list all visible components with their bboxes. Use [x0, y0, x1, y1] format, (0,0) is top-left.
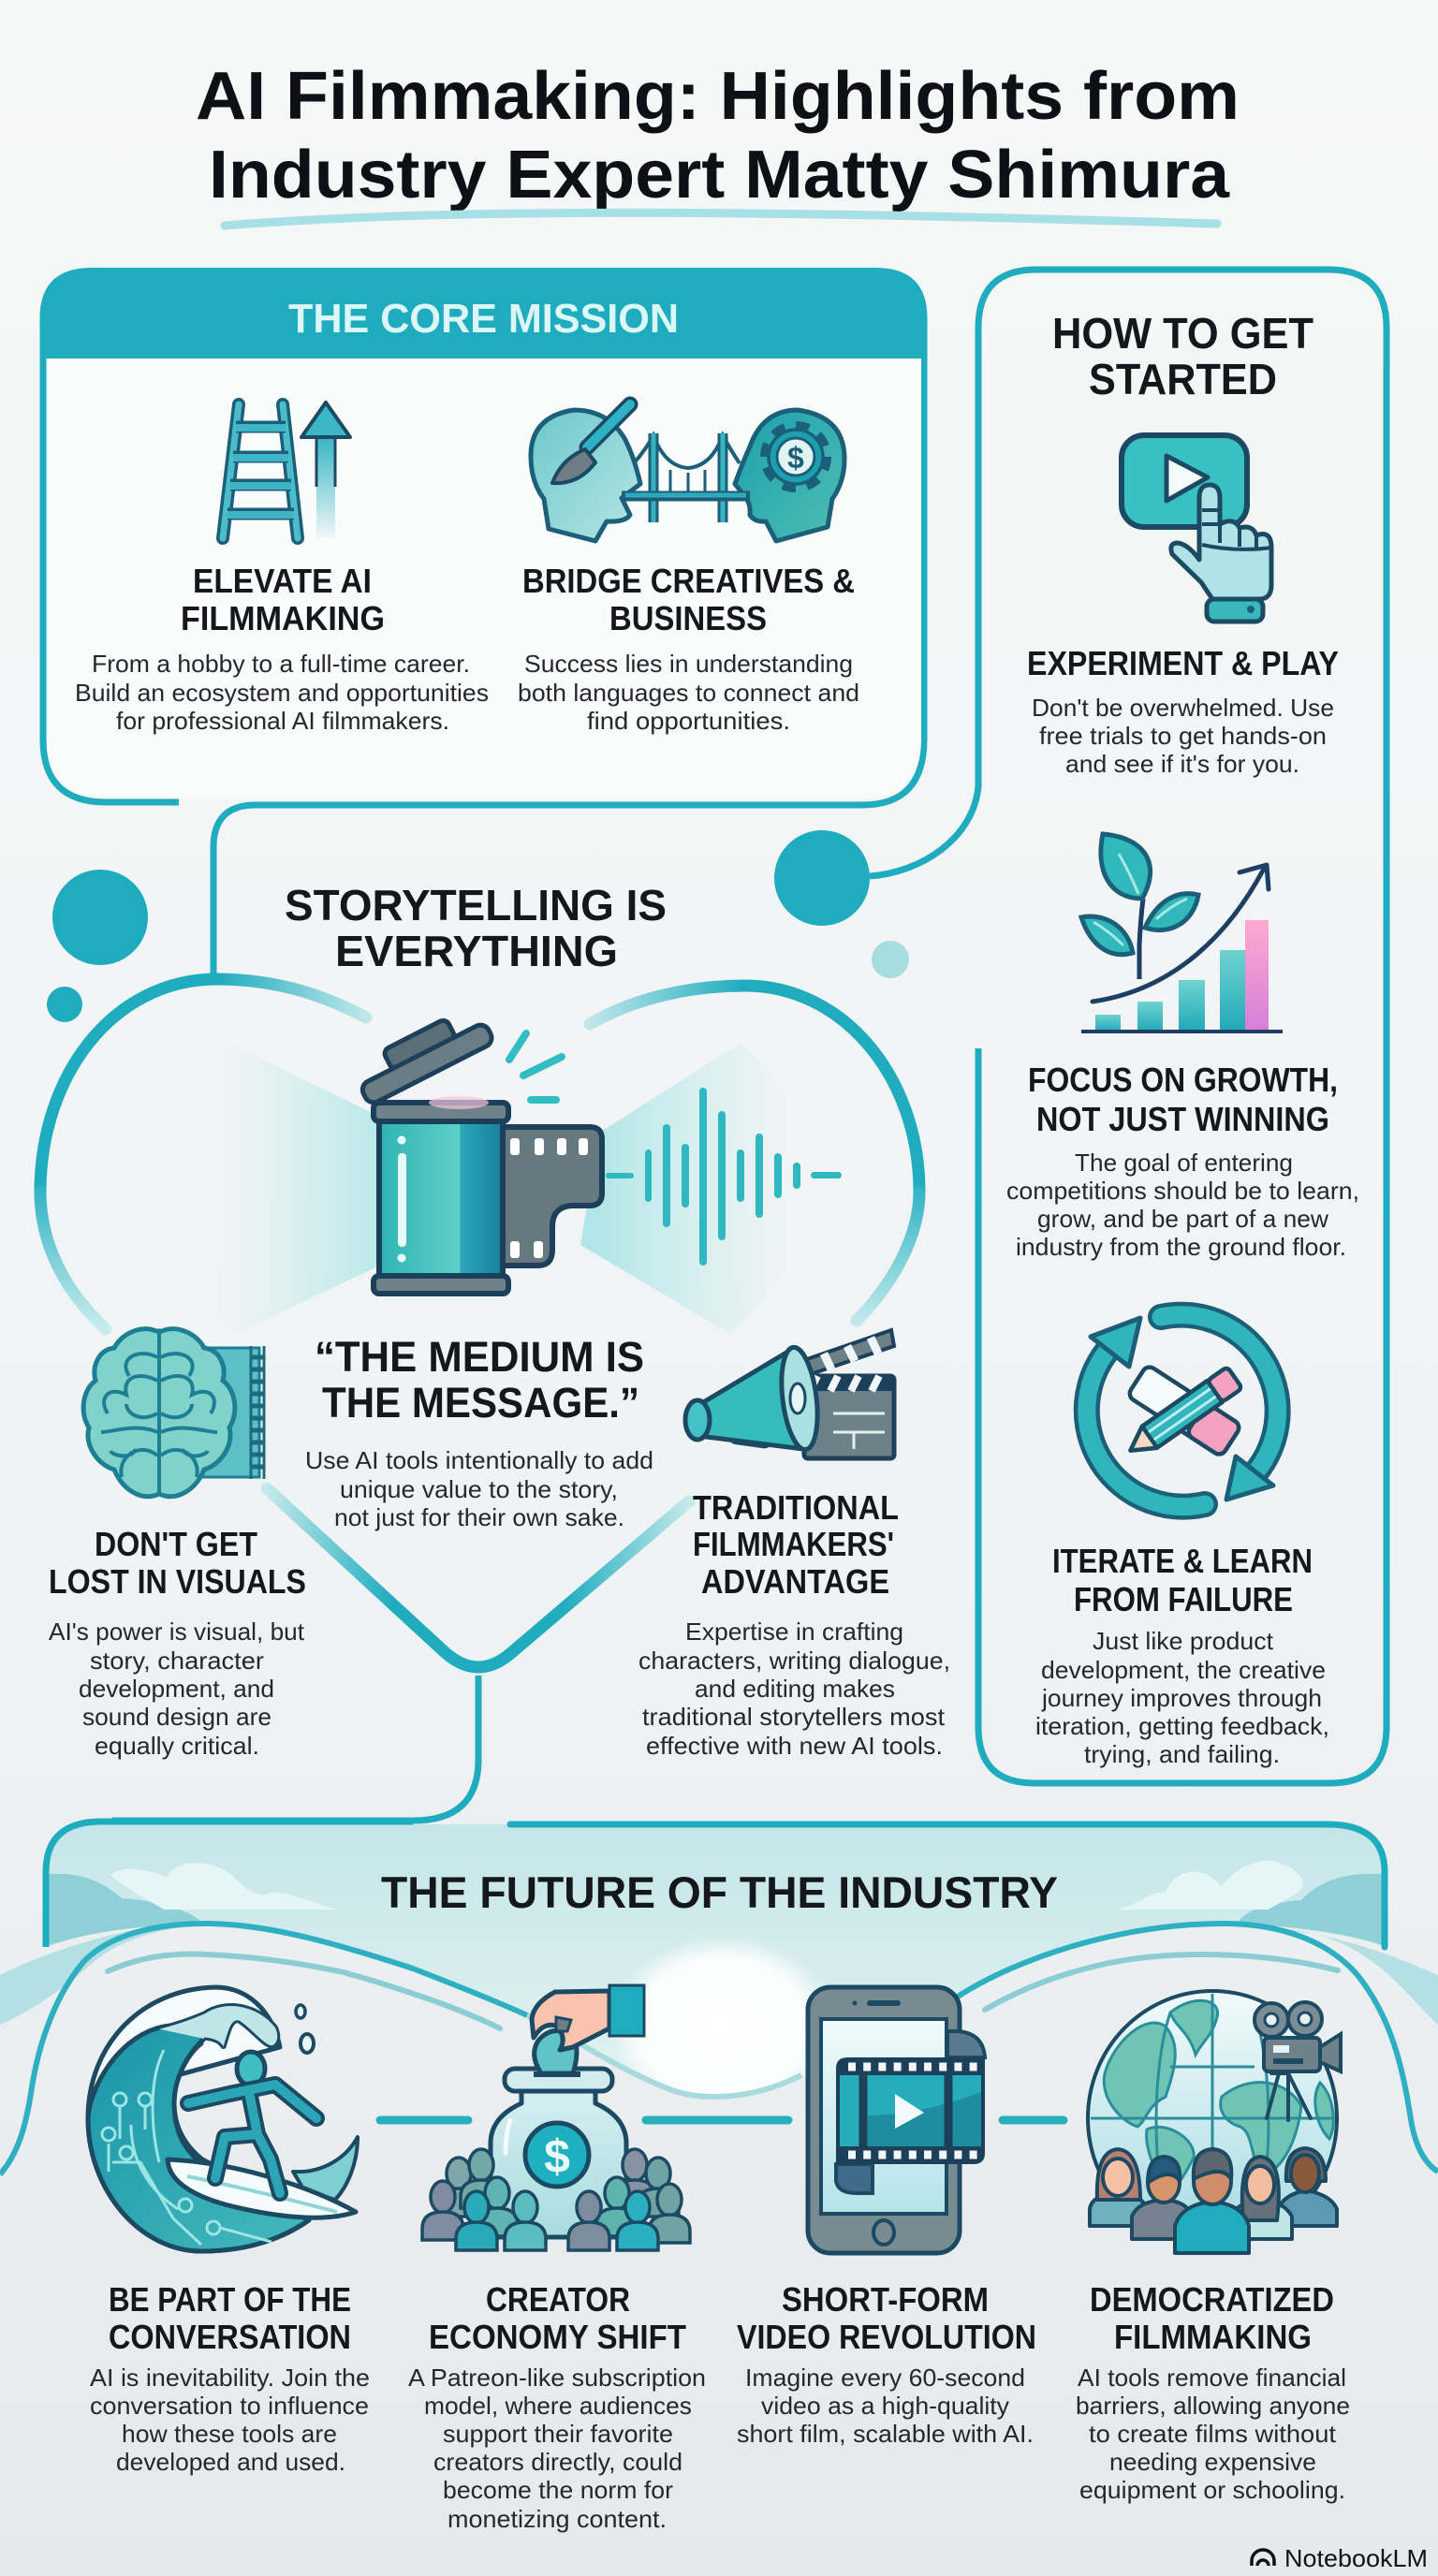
subheading: focus on growth: FOCUS ON GROWTH,: [1028, 1061, 1338, 1099]
icon: jar with coin, hand and crowd: $: [544, 2130, 570, 2183]
text: elevate description: From a hobby to a full-time career.: [92, 650, 470, 678]
subheading: traditional filmmakers' advantage: [693, 1488, 899, 1601]
icon: phone with film strip: [808, 1987, 985, 2253]
icon: bridge between two heads: [531, 404, 844, 541]
subheading: iterate and learn: ITERATE & LEARN: [1052, 1542, 1313, 1580]
subheading: elevate ai filmmaking: FILMMAKING: [181, 599, 385, 637]
panel: the future of the industry: [0, 1822, 1438, 2533]
how to get started heading: HOW TO GET: [1052, 309, 1313, 358]
text: iterate description: development, the creative: [1041, 1656, 1326, 1684]
panel: the core mission: [39, 268, 927, 979]
text: growth description: The goal of entering: [1075, 1149, 1293, 1177]
icon: megaphone and clapperboard: [685, 1330, 894, 1458]
text: iterate description: [1035, 1627, 1329, 1768]
icon: brain with film strip: [83, 1329, 264, 1497]
column: creator economy shift: A Patreon-like subscription: [408, 2364, 706, 2392]
text: iterate description: iteration, getting feedback,: [1035, 1712, 1329, 1740]
title: AI Filmmaking: Highlights from: [196, 59, 1240, 134]
column: creator economy shift: [408, 2280, 706, 2533]
column: short-form video revolution: VIDEO REVOLUTION: [737, 2318, 1036, 2356]
heart outline: [40, 979, 919, 1667]
subheading: don't get lost in visuals: LOST IN VISUALS: [49, 1562, 306, 1601]
decorative circles: [47, 830, 909, 1022]
icon: ladder and arrow: [223, 402, 350, 538]
subheading: elevate ai filmmaking: [181, 562, 385, 637]
text: advantage description: effective with new AI tools.: [646, 1732, 943, 1760]
column: democratized filmmaking: [1076, 2280, 1350, 2504]
text: medium description: Use AI tools intentionally to add: [305, 1446, 653, 1474]
callout: the medium is the message: [305, 1333, 653, 1531]
text: bridge description: find opportunities.: [587, 707, 790, 735]
column: be part of the conversation: AI is inevitability. Join the: [90, 2364, 370, 2392]
icon: play button and hand: [1122, 435, 1271, 622]
text: experiment description: Don't be overwhelmed. Use: [1032, 694, 1334, 722]
icon: bridge between two heads: $: [787, 441, 804, 475]
text: growth description: grow, and be part of a new: [1037, 1205, 1328, 1233]
column: creator economy shift: become the norm for: [443, 2476, 673, 2504]
subheading: don't get lost in visuals: DON'T GET: [95, 1525, 257, 1563]
column: creator economy shift: creators directly, could: [433, 2448, 682, 2476]
subheading: traditional filmmakers' advantage: ADVANTAGE: [701, 1562, 889, 1601]
how to get started heading: STARTED: [1089, 355, 1277, 403]
column: short-form video revolution: [737, 2280, 1036, 2448]
light beams: [178, 1037, 814, 1334]
column: democratized filmmaking: AI tools remove financial: [1078, 2364, 1346, 2392]
subheading: elevate ai filmmaking: ELEVATE AI: [193, 562, 372, 600]
subheading: traditional filmmakers' advantage: FILMMAKERS': [693, 1525, 894, 1563]
text: experiment description: free trials to get hands-on: [1039, 722, 1327, 750]
subheading: traditional filmmakers' advantage: TRADITIONAL: [693, 1488, 899, 1527]
column: democratized filmmaking: DEMOCRATIZED: [1090, 2280, 1334, 2319]
subheading: bridge creatives and business: BUSINESS: [609, 599, 767, 637]
text: iterate description: trying, and failing.: [1084, 1740, 1280, 1768]
column: short-form video revolution: Imagine every 60-second: [745, 2364, 1025, 2392]
text: bridge description: both languages to connect and: [518, 679, 859, 707]
column: be part of the conversation: [90, 2280, 370, 2476]
text: growth description: industry from the ground floor.: [1016, 1233, 1346, 1261]
subheading: experiment and play: EXPERIMENT & PLAY: [1027, 644, 1339, 682]
text: visuals description: [49, 1617, 305, 1760]
column: be part of the conversation: developed and used.: [116, 2448, 345, 2476]
banner background with clouds and waves: [0, 1824, 1438, 2174]
future heading: THE FUTURE OF THE INDUSTRY: [381, 1867, 1058, 1917]
text: visuals description: AI's power is visual, but: [49, 1617, 305, 1646]
callout: the medium is the message: THE MESSAGE.”: [322, 1379, 639, 1427]
text: visuals description: sound design are: [82, 1703, 271, 1731]
icon: iteration arrows with pencil and eraser: [1087, 1315, 1278, 1507]
text: visuals description: equally critical.: [95, 1732, 259, 1760]
NotebookLM logo: NotebookLM: [1284, 2544, 1428, 2572]
core mission header band: [39, 268, 927, 359]
banner outline: [46, 1822, 1385, 1947]
panel: storytelling is everything: [40, 830, 950, 1821]
text: medium description: not just for their own sake.: [334, 1503, 624, 1531]
column: creator economy shift: CREATOR: [486, 2280, 630, 2319]
column: short-form video revolution: SHORT-FORM: [782, 2280, 989, 2319]
subheading: bridge creatives and business: [522, 562, 855, 637]
text: advantage description: [638, 1617, 950, 1760]
icon: sound wave: [606, 1088, 842, 1266]
callout: the medium is the message: “THE MEDIUM IS: [315, 1333, 644, 1381]
how to get started heading: [1052, 309, 1313, 403]
panel: how to get started: [870, 270, 1387, 1783]
column: be part of the conversation: conversation to influence: [90, 2392, 369, 2420]
icon: globe, camera and diverse people: [1088, 1991, 1341, 2253]
column: creator economy shift: ECONOMY SHIFT: [429, 2318, 686, 2356]
column: be part of the conversation: how these tools are: [122, 2420, 337, 2448]
column: democratized filmmaking: barriers, allowing anyone: [1076, 2392, 1350, 2420]
storytelling heading: STORYTELLING IS: [285, 881, 667, 929]
column: democratized filmmaking: to create films without: [1089, 2420, 1337, 2448]
column: democratized filmmaking: needing expensive: [1109, 2448, 1316, 2476]
subheading: don't get lost in visuals: [49, 1525, 306, 1601]
column: creator economy shift: support their favorite: [443, 2420, 673, 2448]
subheading: iterate and learn: FROM FAILURE: [1074, 1580, 1293, 1618]
column: be part of the conversation: BE PART OF THE: [109, 2280, 351, 2319]
connector dashes: [380, 2115, 1064, 2125]
icon: jar with coin, hand and crowd: [422, 1985, 690, 2250]
subheading: focus on growth: NOT JUST WINNING: [1036, 1100, 1329, 1138]
text: medium description: [305, 1446, 653, 1531]
text: experiment description: [1032, 694, 1334, 778]
column: short-form video revolution: short film, scalable with AI.: [737, 2420, 1034, 2448]
column: creator economy shift: monetizing content.: [448, 2505, 667, 2533]
text: bridge description: Success lies in understanding: [524, 650, 853, 678]
text: elevate description: for professional AI filmmakers.: [116, 707, 449, 735]
icon: plant and growth chart: [1081, 834, 1283, 1032]
column: democratized filmmaking: FILMMAKING: [1114, 2318, 1312, 2356]
icon: surfer on digital wave: [88, 1987, 358, 2251]
subheading: iterate and learn: [1052, 1542, 1313, 1618]
core mission heading: THE CORE MISSION: [288, 296, 679, 342]
text: advantage description: characters, writing dialogue,: [638, 1647, 950, 1675]
text: iterate description: Just like product: [1093, 1627, 1274, 1655]
text: growth description: [1006, 1149, 1359, 1261]
text: elevate description: Build an ecosystem and opportunities: [75, 679, 489, 707]
storytelling heading: EVERYTHING: [335, 927, 618, 975]
text: elevate description: [75, 650, 489, 735]
column: be part of the conversation: CONVERSATION: [109, 2318, 351, 2356]
text: visuals description: story, character: [90, 1647, 264, 1675]
column: democratized filmmaking: equipment or schooling.: [1079, 2476, 1345, 2504]
text: advantage description: Expertise in crafting: [685, 1617, 903, 1646]
text: growth description: competitions should be to learn,: [1006, 1177, 1359, 1205]
title: Industry Expert Matty Shimura: [209, 138, 1230, 212]
column: creator economy shift: model, where audiences: [424, 2392, 692, 2420]
subheading: focus on growth: [1028, 1061, 1338, 1138]
text: advantage description: and editing makes: [695, 1675, 895, 1703]
icon: film canister: [350, 1003, 602, 1294]
subheading: bridge creatives and business: BRIDGE CREATIVES &: [522, 562, 855, 600]
text: medium description: unique value to the story,: [340, 1475, 618, 1503]
title: [196, 59, 1240, 226]
column: short-form video revolution: video as a high-quality: [761, 2392, 1009, 2420]
text: experiment description: and see if it's for you.: [1065, 750, 1299, 778]
text: iterate description: journey improves through: [1041, 1684, 1322, 1712]
text: advantage description: traditional storytellers most: [642, 1703, 946, 1731]
text: visuals description: development, and: [79, 1675, 274, 1703]
text: bridge description: [518, 650, 859, 735]
storytelling heading: [285, 881, 667, 975]
connector down from heart: [112, 1676, 478, 1821]
